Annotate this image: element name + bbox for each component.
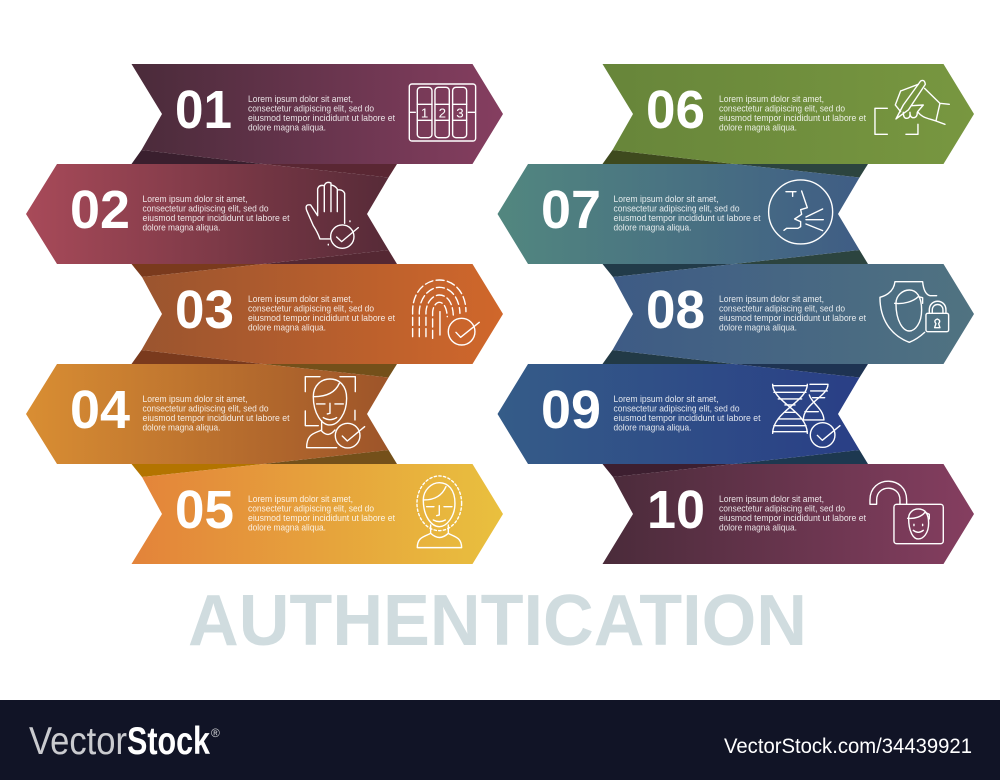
text block 03: eiusmod tempor incididunt ut labore et: [248, 312, 395, 323]
icon: hand with check: [306, 182, 358, 248]
icon: DNA with check: [773, 384, 840, 447]
icon: voice recognition: [769, 180, 833, 244]
text block 09: eiusmod tempor incididunt ut labore et: [614, 412, 761, 423]
panel 07: 07: [541, 180, 601, 240]
text block 08: eiusmod tempor incididunt ut labore et: [719, 312, 866, 323]
text block 06: dolore magna aliqua.: [719, 121, 797, 132]
panel 08: [612, 264, 974, 364]
text block 01: consectetur adipiscing elit, sed do: [248, 102, 374, 113]
text block 01: Lorem ipsum dolor sit amet,: [248, 93, 353, 104]
text block 06: eiusmod tempor incididunt ut labore et: [719, 112, 866, 123]
icon: code lock 123: [409, 84, 476, 141]
text block 05: dolore magna aliqua.: [248, 521, 326, 532]
panel 04: [26, 364, 388, 464]
icon: open lock with face: [870, 481, 943, 544]
icon: shield with face and lock: [880, 282, 949, 342]
text block 04: consectetur adipiscing elit, sed do: [142, 402, 268, 413]
logo: ®: [211, 726, 220, 740]
panel 02: 02: [70, 180, 130, 240]
image id: VectorStock.com/34439921: [724, 735, 972, 758]
fold shadows: right column: [602, 150, 868, 477]
icon: code lock 123: 1: [421, 105, 428, 120]
text block 02: Lorem ipsum dolor sit amet,: [142, 193, 248, 204]
panel 06: [602, 64, 974, 164]
text block 10: consectetur adipiscing elit, sed do: [719, 502, 845, 513]
footer bar: [0, 700, 1000, 780]
text block 07: Lorem ipsum dolor sit amet,: [614, 193, 718, 204]
panel 02: [26, 164, 388, 264]
text block 08: Lorem ipsum dolor sit amet,: [719, 293, 824, 304]
panel 06: 06: [646, 80, 705, 140]
fold shadows: left column: [132, 150, 397, 477]
panel 10: 10: [647, 480, 705, 540]
text block 09: consectetur adipiscing elit, sed do: [614, 402, 740, 413]
icon: code lock 123: 3: [456, 105, 464, 120]
text block 10: Lorem ipsum dolor sit amet,: [719, 493, 824, 504]
title: AUTHENTICATION: [188, 581, 807, 661]
text block 04: Lorem ipsum dolor sit amet,: [142, 393, 248, 404]
text block 06: consectetur adipiscing elit, sed do: [719, 102, 845, 113]
icon: signature hand with pen: [875, 80, 949, 134]
panel 05: 05: [175, 480, 234, 540]
text block 07: dolore magna aliqua.: [614, 221, 692, 232]
panel 08: 08: [646, 280, 705, 340]
logo: Vector: [29, 720, 127, 763]
text block 07: eiusmod tempor incididunt ut labore et: [614, 212, 761, 223]
text block 09: Lorem ipsum dolor sit amet,: [614, 393, 718, 404]
panel 10: [602, 464, 974, 564]
text block 09: dolore magna aliqua.: [614, 421, 692, 432]
text block 10: dolore magna aliqua.: [719, 521, 797, 532]
text block 02: eiusmod tempor incididunt ut labore et: [142, 212, 290, 223]
text block 01: eiusmod tempor incididunt ut labore et: [248, 112, 395, 123]
panel 04: 04: [70, 380, 130, 440]
panel 05: [132, 464, 503, 564]
icon: code lock 123: 2: [439, 105, 446, 120]
text block 06: Lorem ipsum dolor sit amet,: [719, 93, 824, 104]
text block 05: Lorem ipsum dolor sit amet,: [248, 493, 353, 504]
text block 04: eiusmod tempor incididunt ut labore et: [142, 412, 290, 423]
text block 03: Lorem ipsum dolor sit amet,: [248, 293, 353, 304]
text block 08: consectetur adipiscing elit, sed do: [719, 302, 845, 313]
panel 09: [498, 364, 860, 464]
text block 05: consectetur adipiscing elit, sed do: [248, 502, 374, 513]
panel 09: 09: [541, 380, 601, 440]
logo: Stock: [127, 720, 210, 763]
panel 03: 03: [175, 280, 234, 340]
text block 01: dolore magna aliqua.: [248, 121, 326, 132]
text block 02: consectetur adipiscing elit, sed do: [142, 202, 268, 213]
text block 08: dolore magna aliqua.: [719, 321, 797, 332]
panel 03: [142, 264, 503, 364]
icon: face recognition: [417, 476, 462, 548]
text block 05: eiusmod tempor incididunt ut labore et: [248, 512, 395, 523]
text block 10: eiusmod tempor incididunt ut labore et: [719, 512, 866, 523]
panel 01: [132, 64, 503, 164]
panel 01: 01: [175, 80, 232, 140]
text block 03: consectetur adipiscing elit, sed do: [248, 302, 374, 313]
text block 03: dolore magna aliqua.: [248, 321, 326, 332]
icon: fingerprint with check: [413, 280, 479, 345]
text block 07: consectetur adipiscing elit, sed do: [614, 202, 740, 213]
logo: [29, 720, 220, 763]
icon: face scan with check: [305, 377, 365, 448]
text block 02: dolore magna aliqua.: [142, 221, 220, 232]
panel 07: [498, 164, 860, 264]
text block 04: dolore magna aliqua.: [142, 421, 220, 432]
